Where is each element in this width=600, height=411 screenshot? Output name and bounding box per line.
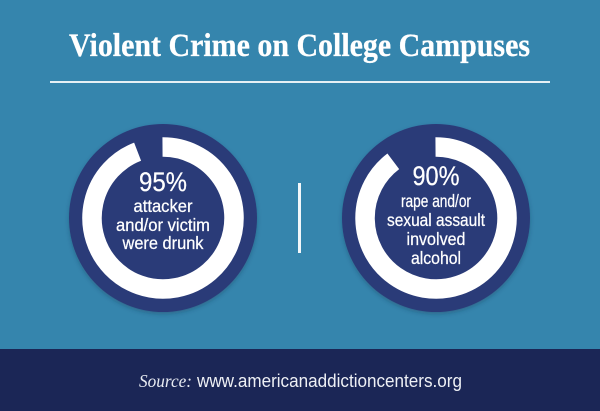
text: 90% description	[387, 191, 485, 268]
donut chart: 90%	[342, 124, 530, 312]
text: 90% description: rape and/or	[401, 191, 471, 211]
text: 90% description: sexual assault	[387, 210, 485, 230]
source label: Source:	[139, 371, 192, 391]
footer band	[0, 349, 600, 411]
donut chart: 95%	[69, 124, 257, 312]
source URL: www.americanaddictioncenters.org	[196, 371, 462, 391]
text: 90% value: 90%	[412, 161, 460, 191]
text: 95% description: and/or victim	[116, 215, 210, 235]
text: 90% description: alcohol	[411, 248, 461, 268]
panel: 90% statistic	[342, 124, 530, 312]
text: 95% value: 95%	[139, 167, 187, 197]
text: 95% description	[116, 196, 210, 253]
text: 90% description: involved	[406, 229, 466, 249]
text: 95% description: attacker	[134, 196, 193, 216]
text: 95% description: were drunk	[122, 233, 204, 253]
title: Violent Crime on College Campuses	[69, 28, 530, 64]
panel: 95% statistic	[69, 124, 257, 312]
